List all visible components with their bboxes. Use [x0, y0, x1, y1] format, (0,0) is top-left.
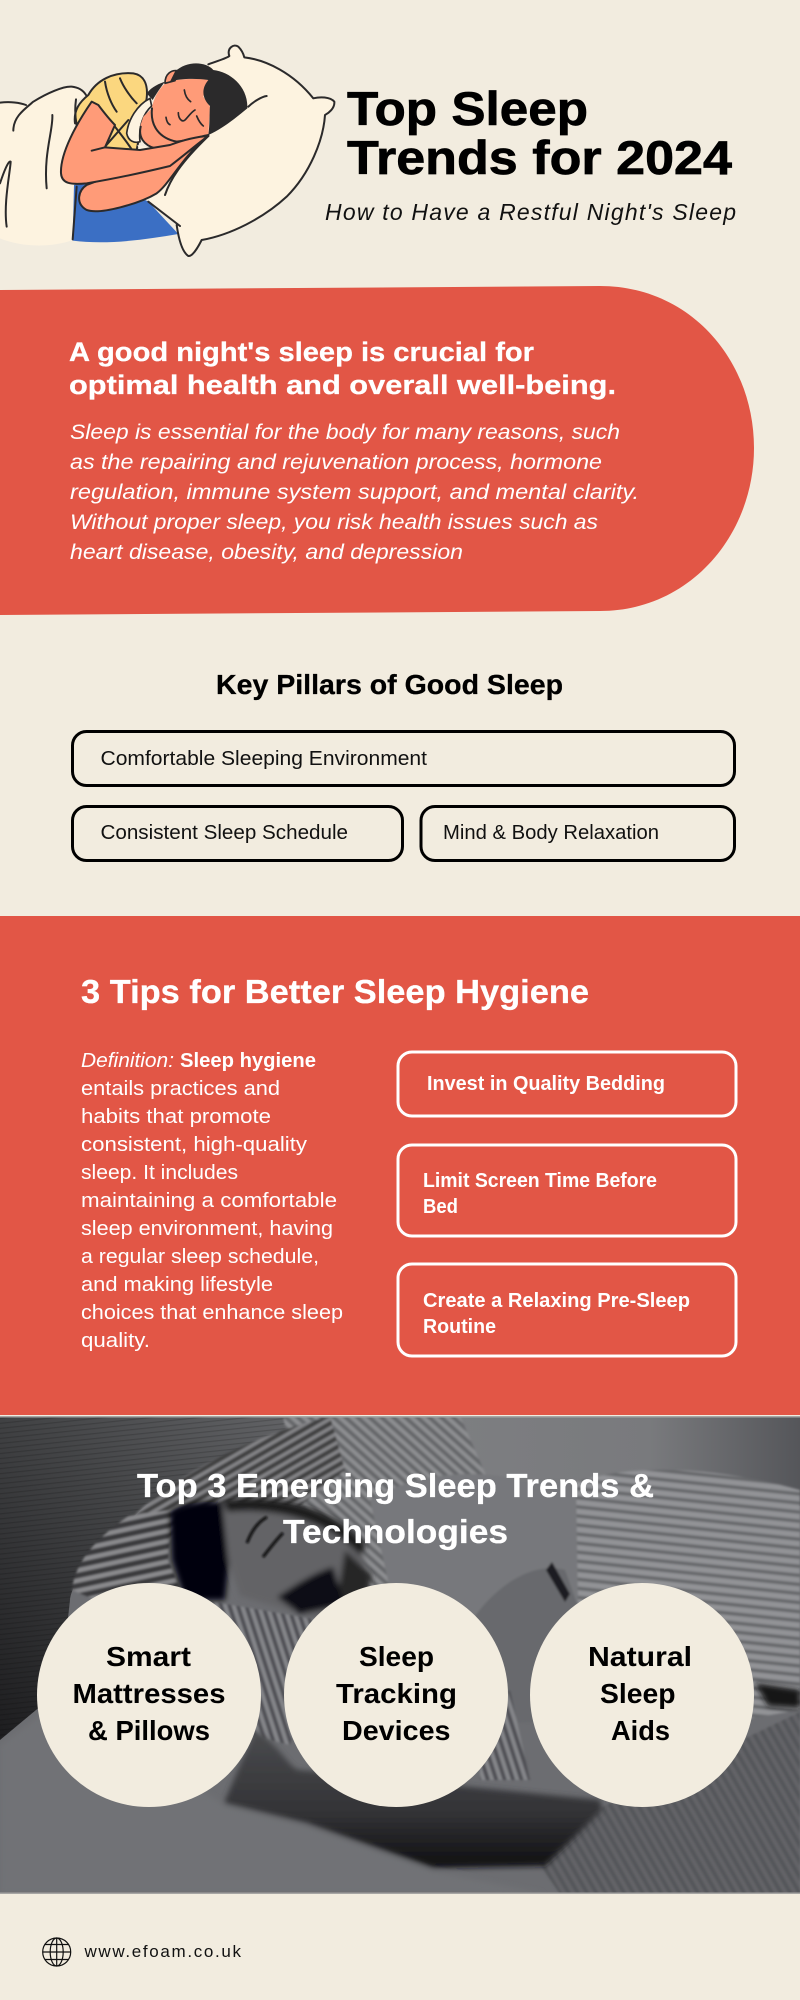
circle: smart mattresses and pillows: Smart: [106, 1641, 191, 1672]
illustration: person sleeping on a pillow: [0, 46, 334, 256]
panel: key pillars: [72, 669, 734, 860]
pillar: comfortable sleeping environment: [72, 732, 734, 786]
banner body text: Sleep is essential for the body for many reasons, such: [70, 421, 620, 444]
definition text: maintaining a comfortable: [81, 1190, 337, 1212]
trends heading: Technologies: [283, 1513, 508, 1550]
pillar: mind and body relaxation: [421, 806, 734, 860]
photo: man sleeping in striped bedding: [0, 1416, 800, 1894]
definition text: [81, 1050, 343, 1352]
pillars heading: Key Pillars of Good Sleep: [216, 669, 563, 700]
definition text: habits that promote: [81, 1106, 271, 1128]
title: [347, 82, 732, 184]
banner shape: [0, 286, 754, 615]
tips background: [0, 916, 800, 1415]
panel: why sleep matters: [0, 286, 754, 615]
banner heading: optimal health and overall well-being.: [69, 370, 616, 400]
circle: smart mattresses and pillows: & Pillows: [88, 1715, 210, 1746]
circle: natural sleep aids: Sleep: [600, 1678, 676, 1709]
tip: limit screen time: Bed: [423, 1196, 458, 1218]
definition text: sleep. It includes: [81, 1162, 238, 1184]
panel: sleep hygiene tips: [0, 916, 800, 1415]
circle: sleep tracking devices: Devices: [342, 1715, 450, 1746]
pillar: comfortable sleeping environment: Comfortable Sleeping Environment: [100, 748, 427, 770]
definition text: Sleep hygiene: [180, 1050, 316, 1072]
footer website: www.efoam.co.uk: [84, 1942, 242, 1961]
tips heading: 3 Tips for Better Sleep Hygiene: [81, 973, 589, 1010]
banner body text: regulation, immune system support, and mental clarity.: [70, 481, 639, 504]
tip: invest in quality bedding: [398, 1052, 736, 1116]
definition text: Definition:: [81, 1050, 174, 1072]
circle: natural sleep aids: Natural: [588, 1641, 692, 1672]
trends heading: [137, 1467, 654, 1550]
definition text: a regular sleep schedule,: [81, 1246, 319, 1268]
title: Trends for 2024: [347, 131, 732, 184]
title: Top Sleep: [347, 82, 588, 135]
pillar: consistent sleep schedule: [72, 806, 402, 860]
pillar: mind and body relaxation: Mind & Body Relaxation: [443, 822, 659, 844]
definition text: consistent, high-quality: [81, 1134, 307, 1156]
banner body text: Without proper sleep, you risk health issues such as: [70, 511, 599, 534]
tip: limit screen time: Limit Screen Time Before: [423, 1170, 657, 1192]
circle: smart mattresses and pillows: Mattresses: [72, 1678, 226, 1709]
icon: globe: [43, 1938, 71, 1966]
tip: limit screen time: [398, 1145, 736, 1236]
definition text: quality.: [81, 1330, 150, 1352]
circle: natural sleep aids: Aids: [611, 1715, 670, 1746]
pillar: consistent sleep schedule: Consistent Sleep Schedule: [100, 822, 348, 844]
banner heading: A good night's sleep is crucial for: [69, 337, 535, 367]
banner body text: heart disease, obesity, and depression: [70, 541, 463, 564]
circle: sleep tracking devices: Sleep: [359, 1641, 434, 1672]
banner heading: [69, 337, 616, 400]
tip: invest in quality bedding: Invest in Quality Bedding: [427, 1073, 665, 1095]
tip: relaxing pre-sleep routine: [398, 1264, 736, 1356]
subtitle: How to Have a Restful Night's Sleep: [325, 199, 736, 225]
banner body text: as the repairing and rejuvenation process, hormone: [70, 451, 602, 474]
circle: smart mattresses and pillows: [37, 1583, 261, 1807]
tip: relaxing pre-sleep routine: Create a Relaxing Pre-Sleep: [423, 1290, 690, 1312]
trends heading: Top 3 Emerging Sleep Trends &: [137, 1467, 654, 1504]
definition text: sleep environment, having: [81, 1218, 333, 1240]
definition text: choices that enhance sleep: [81, 1302, 343, 1324]
banner body text: [70, 421, 639, 564]
tip: relaxing pre-sleep routine: Routine: [423, 1316, 496, 1338]
circle: sleep tracking devices: [284, 1583, 508, 1807]
definition text: and making lifestyle: [81, 1274, 273, 1296]
circle: sleep tracking devices: Tracking: [336, 1678, 457, 1709]
definition text: entails practices and: [81, 1078, 280, 1100]
circle: natural sleep aids: [530, 1583, 754, 1807]
